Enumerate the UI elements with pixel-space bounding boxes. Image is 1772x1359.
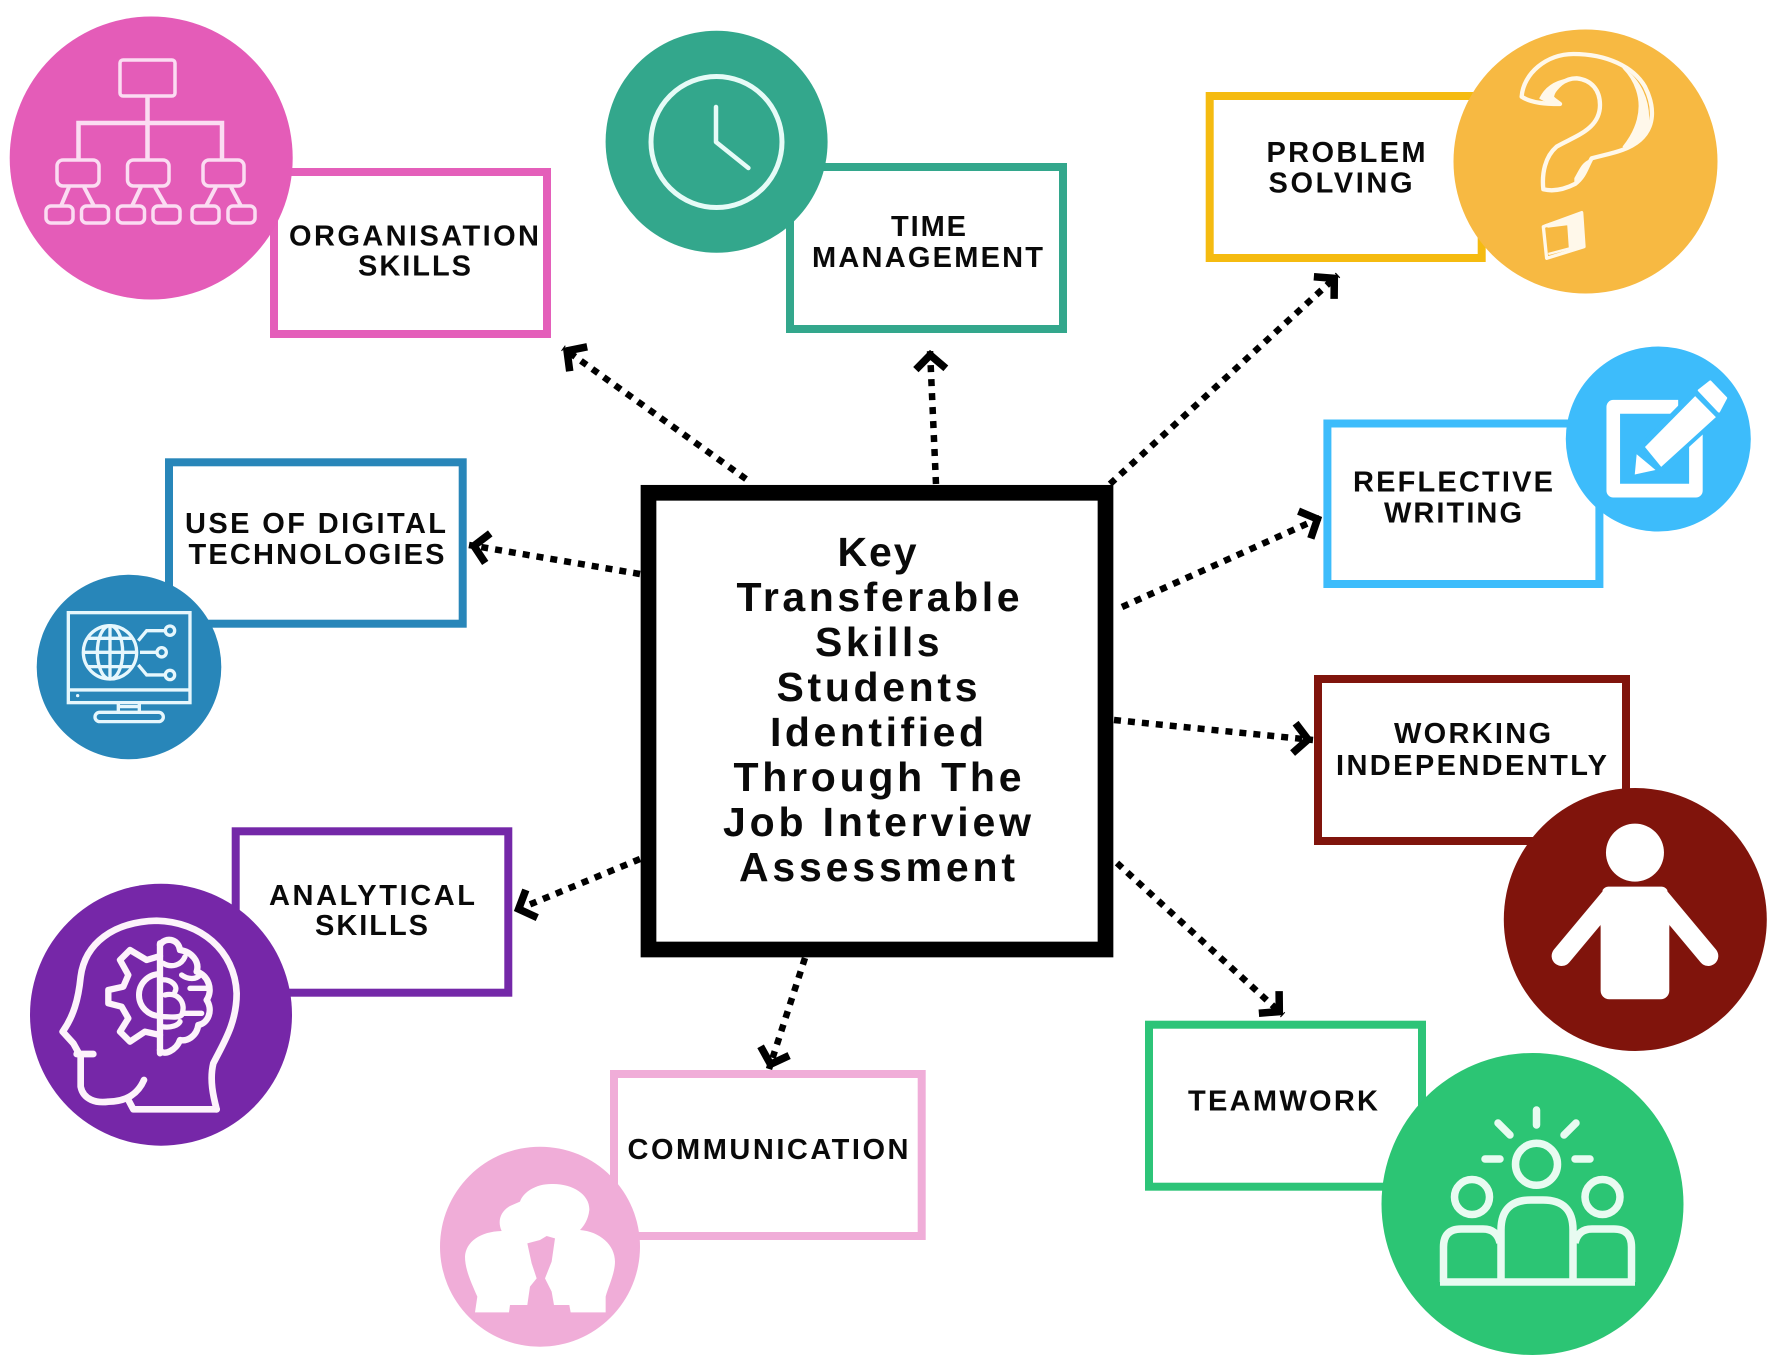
- organisation circle: [10, 16, 293, 300]
- title: Assessment: [739, 844, 1015, 890]
- panel: use of digital technologies: [37, 462, 463, 759]
- title: Through The: [734, 754, 1022, 800]
- digital circle: [37, 575, 221, 759]
- panel: teamwork: [1149, 1025, 1684, 1355]
- arrow: to problem solving: [1110, 275, 1338, 484]
- icon: question mark: [1522, 54, 1652, 258]
- teamwork box: [1149, 1025, 1422, 1187]
- working label: WORKING: [1394, 718, 1551, 750]
- icon: standing person: [1562, 824, 1708, 999]
- arrow: to communication: [769, 958, 805, 1069]
- title: Job Interview: [723, 799, 1031, 845]
- reflective label: WRITING: [1384, 498, 1522, 530]
- teamwork label: TEAMWORK: [1188, 1086, 1378, 1118]
- analytical label: ANALYTICAL: [269, 880, 475, 912]
- icon: monitor with globe: [68, 613, 190, 722]
- problem label: PROBLEM: [1266, 137, 1426, 169]
- analytical box: [236, 831, 508, 993]
- icon: clock: [651, 76, 782, 208]
- title: Students: [776, 664, 978, 710]
- icon: team of three people: [1440, 1110, 1635, 1282]
- organisation label: ORGANISATION: [289, 220, 539, 252]
- arrow: to reflective writing: [1122, 517, 1322, 607]
- time circle: [606, 31, 828, 253]
- time label: MANAGEMENT: [812, 242, 1043, 274]
- reflective box: [1327, 424, 1599, 584]
- arrow: to organisation skills: [563, 348, 746, 479]
- analytical circle: [30, 884, 292, 1146]
- working box: [1318, 679, 1626, 841]
- reflective circle: [1566, 346, 1751, 532]
- arrow: to time management: [930, 350, 936, 484]
- icon: organisation chart: [46, 60, 255, 223]
- panel: organisation skills: [10, 16, 547, 334]
- time box: [790, 167, 1063, 329]
- icon: facing heads: [465, 1184, 615, 1312]
- reflective label: REFLECTIVE: [1353, 466, 1553, 498]
- time label: TIME: [891, 211, 966, 243]
- panel: time management: [606, 31, 1063, 329]
- digital label: TECHNOLOGIES: [188, 539, 444, 571]
- arrow: to teamwork: [1117, 863, 1283, 1015]
- panel: communication: [440, 1074, 922, 1347]
- working circle: [1504, 788, 1767, 1051]
- communication circle: [440, 1147, 640, 1347]
- digital box: [169, 462, 463, 624]
- communication box: [614, 1074, 922, 1236]
- problem circle: [1454, 30, 1718, 294]
- icon: pencil on square: [1613, 382, 1726, 491]
- arrow: to analytical skills: [514, 859, 640, 911]
- icon: head with gear and brain: [63, 921, 237, 1109]
- panel: reflective writing: [1327, 346, 1751, 584]
- communication label: COMMUNICATION: [628, 1134, 908, 1166]
- title: Skills: [815, 619, 940, 665]
- analytical label: SKILLS: [315, 910, 428, 942]
- title: Identified: [770, 709, 984, 755]
- panel: central title box: [648, 493, 1106, 950]
- arrow: to working independently: [1114, 720, 1313, 740]
- title: Transferable: [736, 574, 1020, 620]
- arrow: to use of digital technologies: [469, 545, 640, 574]
- panel: problem solving: [1210, 30, 1718, 294]
- organisation box: [274, 172, 547, 334]
- central box border: [648, 493, 1106, 950]
- organisation label: SKILLS: [358, 250, 471, 282]
- panel: analytical skills: [30, 831, 508, 1146]
- problem box: [1210, 96, 1482, 258]
- panel: working independently: [1318, 679, 1767, 1051]
- title: Key: [838, 529, 917, 575]
- teamwork circle: [1382, 1053, 1684, 1355]
- working label: INDEPENDENTLY: [1336, 750, 1607, 782]
- digital label: USE OF DIGITAL: [185, 508, 446, 540]
- problem label: SOLVING: [1268, 168, 1412, 200]
